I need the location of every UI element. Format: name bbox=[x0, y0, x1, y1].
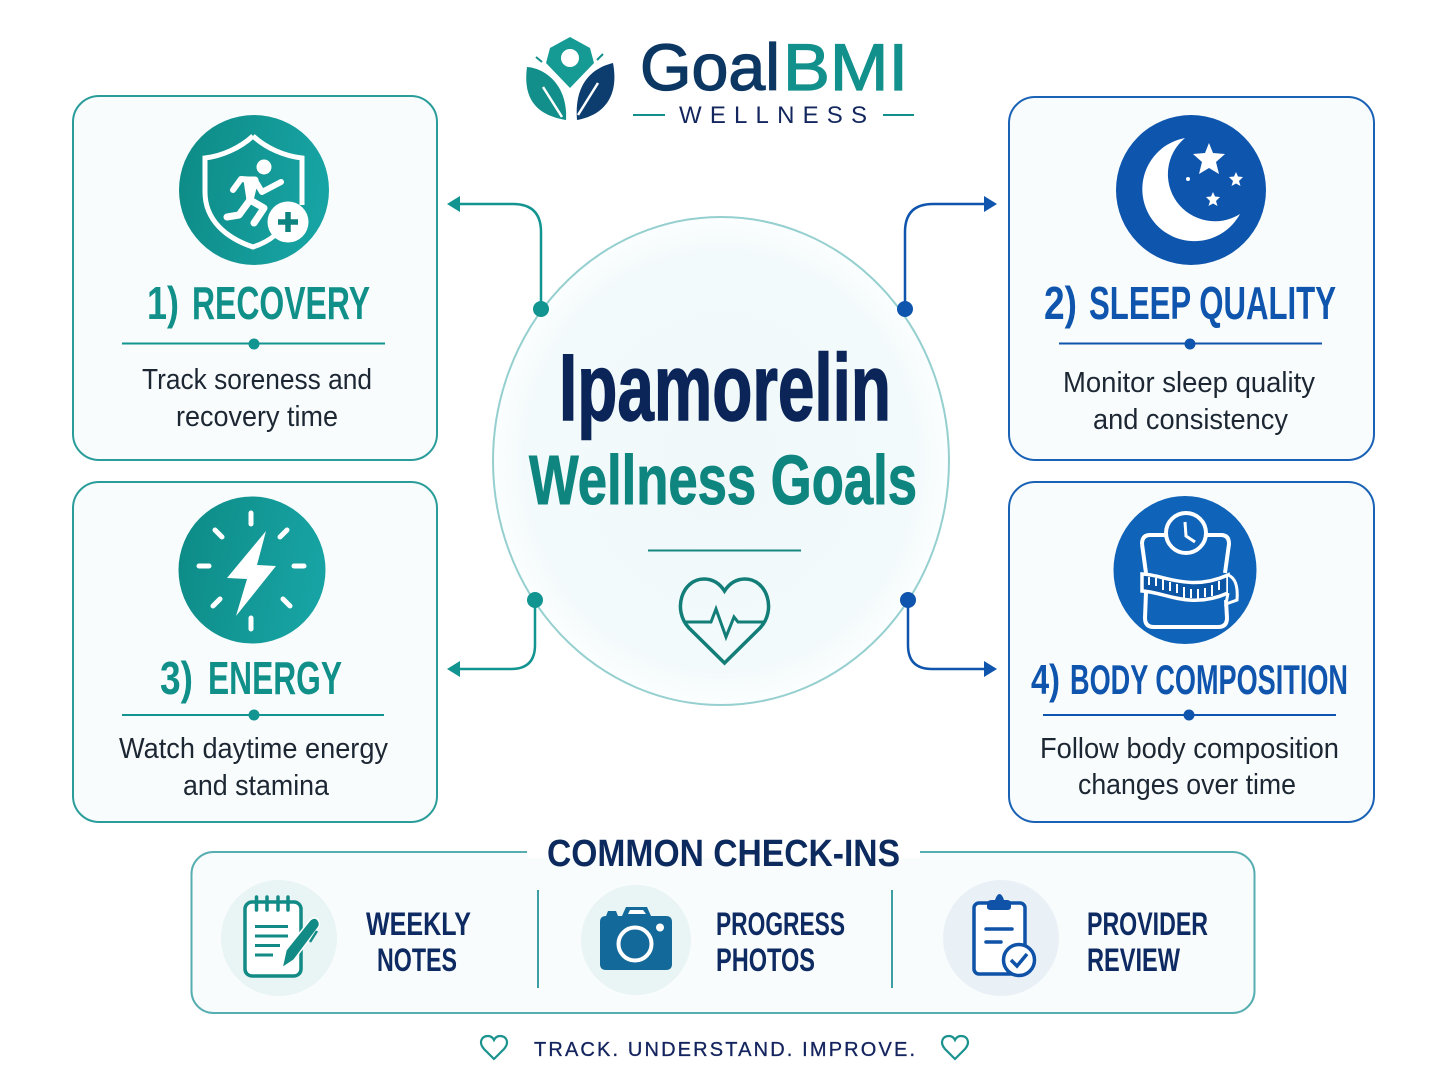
logo bbox=[526, 30, 914, 129]
heading: recovery: 1) bbox=[147, 277, 179, 329]
panel: sleep quality bbox=[1009, 97, 1374, 460]
icon: heart with pulse bbox=[680, 579, 769, 663]
label: progress photos: PROGRESS bbox=[716, 906, 845, 942]
heading: recovery bbox=[147, 277, 370, 329]
heading: body composition bbox=[1031, 656, 1348, 703]
label: progress photos: PHOTOS bbox=[716, 942, 815, 978]
icon: clipboard with check bbox=[974, 894, 1034, 976]
label: provider review: REVIEW bbox=[1087, 942, 1181, 978]
heading: sleep quality bbox=[1044, 277, 1336, 329]
text: recovery bbox=[142, 364, 372, 433]
heading: body composition: 4) bbox=[1031, 656, 1060, 703]
arrow: to recovery bbox=[447, 196, 549, 317]
label: weekly notes: WEEKLY bbox=[366, 906, 471, 942]
heading: energy: ENERGY bbox=[208, 652, 342, 704]
panel: recovery bbox=[73, 96, 437, 460]
panel: body composition bbox=[1009, 482, 1374, 822]
panel: common check-ins bbox=[192, 833, 1254, 1013]
text: energy: Watch daytime energy bbox=[119, 733, 388, 765]
divider: sleep quality bbox=[1059, 338, 1322, 350]
divider: body composition bbox=[1043, 710, 1336, 720]
footer text: TRACK. UNDERSTAND. IMPROVE. bbox=[534, 1039, 915, 1061]
panel: energy bbox=[73, 482, 437, 822]
center circle bbox=[493, 217, 949, 705]
label: provider review: PROVIDER bbox=[1087, 906, 1208, 942]
label: weekly notes bbox=[366, 906, 471, 978]
text: recovery: recovery time bbox=[176, 401, 338, 433]
text: energy: and stamina bbox=[183, 770, 330, 802]
logo wordmark: Goal bbox=[640, 30, 780, 104]
logo wordmark: BMI bbox=[783, 30, 908, 104]
divider: energy bbox=[122, 710, 384, 720]
text: sleep quality: Monitor sleep quality bbox=[1063, 367, 1315, 399]
logo tagline: WELLNESS bbox=[679, 102, 867, 129]
logo mark bbox=[526, 37, 614, 120]
item: progress photos bbox=[581, 885, 845, 995]
icon: lightning bolt bbox=[178, 496, 326, 644]
heading: sleep quality: SLEEP QUALITY bbox=[1089, 277, 1336, 329]
item: weekly notes bbox=[221, 880, 471, 996]
icon: shield with runner bbox=[179, 115, 329, 265]
heading: energy bbox=[160, 652, 342, 704]
icon: heart left bbox=[481, 1036, 507, 1059]
arrow: to sleep quality bbox=[897, 196, 997, 317]
text: sleep quality bbox=[1063, 367, 1315, 436]
item: provider review bbox=[943, 880, 1208, 996]
heading: recovery: RECOVERY bbox=[192, 277, 370, 329]
label: weekly notes: NOTES bbox=[377, 942, 457, 978]
label: provider review bbox=[1087, 906, 1208, 978]
text: energy bbox=[119, 733, 388, 802]
heading: common check-ins: COMMON CHECK-INS bbox=[547, 833, 900, 875]
title: Ipamorelin: Ipamorelin bbox=[559, 335, 891, 441]
icon: heart right bbox=[942, 1036, 968, 1059]
text: recovery: Track soreness and bbox=[142, 364, 372, 396]
text: body composition: Follow body composition bbox=[1040, 733, 1339, 765]
logo wordmark bbox=[640, 30, 908, 104]
heading: energy: 3) bbox=[160, 652, 193, 704]
icon: moon and stars bbox=[1116, 115, 1266, 265]
divider: recovery bbox=[122, 338, 385, 350]
label: progress photos bbox=[716, 906, 845, 978]
text: body composition: changes over time bbox=[1078, 769, 1296, 801]
footer tagline bbox=[481, 1036, 968, 1061]
heading: sleep quality: 2) bbox=[1044, 277, 1077, 329]
arrow: to body composition bbox=[900, 592, 997, 677]
icon: scale and tape bbox=[1114, 496, 1256, 644]
subtitle: Wellness Goals: Wellness Goals bbox=[529, 441, 917, 519]
arrow: to energy bbox=[447, 592, 543, 677]
icon: camera bbox=[600, 907, 672, 970]
icon: notepad and pen bbox=[245, 897, 320, 976]
text: body composition bbox=[1040, 733, 1339, 801]
text: sleep quality: and consistency bbox=[1093, 404, 1288, 436]
